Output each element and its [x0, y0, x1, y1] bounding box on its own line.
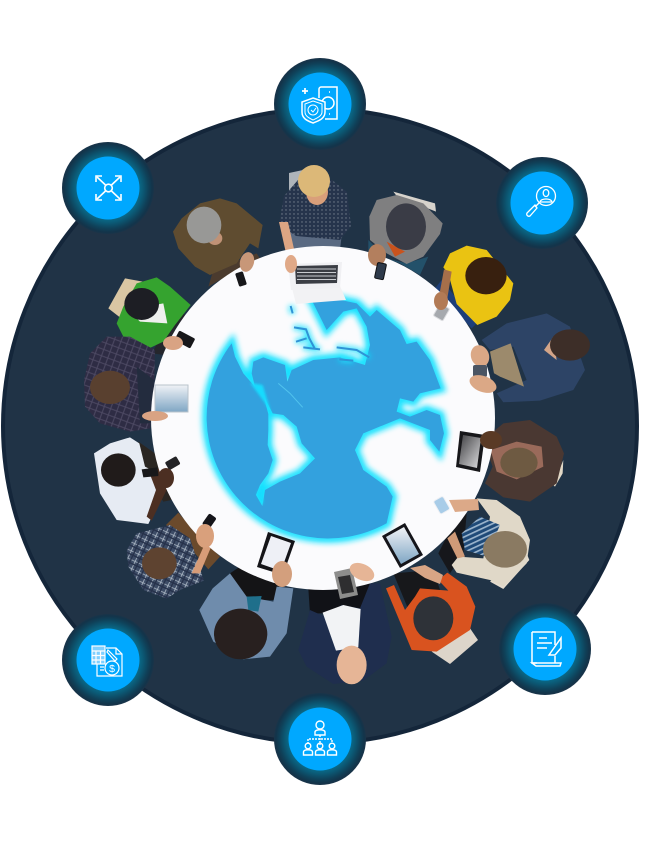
person: man in dark purple plaid shirt — [84, 337, 155, 432]
people seated around the table — [84, 165, 590, 684]
icon: org chart — [304, 721, 336, 755]
person: woman in yellow top — [435, 246, 513, 328]
person: person with afro in blue shirt — [199, 567, 293, 659]
Caribbean island streaks — [278, 383, 303, 407]
person: woman in grey top — [368, 192, 443, 275]
icon: magnifier over person — [527, 186, 556, 216]
tablet with suit man's hand — [334, 559, 377, 599]
tablet: purple plaid man — [142, 385, 188, 421]
person: bald man in dark suit — [298, 583, 392, 684]
tablet: orange man — [382, 523, 443, 584]
ocean — [207, 298, 444, 538]
dollar sign: $ — [109, 663, 115, 675]
icon: shield and banknote — [302, 87, 337, 123]
navy man's hands and phone — [467, 343, 499, 396]
badge: shield and banknote — [274, 58, 366, 150]
person: blonde woman in cream cardigan — [438, 498, 530, 589]
badge: search person — [496, 157, 588, 249]
hand on laptop — [285, 255, 297, 273]
person: man in white shirt — [94, 437, 172, 524]
grey woman's phone and hand — [368, 244, 387, 280]
person: woman in green cardigan — [108, 277, 191, 355]
person: man in navy sweater and khaki trousers — [482, 313, 590, 402]
white shirt man's phone and hand — [158, 456, 181, 488]
Central America strip — [250, 383, 271, 413]
badge: expand network — [62, 142, 154, 234]
laptop — [288, 262, 346, 304]
icon: document and quill — [532, 632, 561, 666]
tablet: right side — [456, 431, 502, 472]
person: man in grey plaid shirt — [127, 513, 220, 599]
tablet: afro person — [257, 532, 295, 587]
badge: document and quill — [499, 603, 591, 695]
badge: organisation chart — [274, 693, 366, 785]
navy background disc — [3, 109, 637, 743]
northern lakes and islands — [291, 306, 369, 361]
plaid man's phone and hand — [196, 513, 217, 548]
icon: expanding arrows — [96, 176, 121, 200]
badge: calculator and invoice — [62, 614, 154, 706]
cream woman's phone and hand — [433, 496, 479, 514]
table devices and hands — [142, 244, 502, 599]
person: man in orange sweater — [386, 570, 478, 664]
person: man in dark brown sweater — [483, 420, 564, 502]
green woman's phone and hand — [163, 330, 195, 350]
Patagonia tip — [257, 487, 263, 505]
northern lakes glow — [291, 306, 369, 361]
round white table — [151, 246, 495, 590]
ocean outline glow — [207, 298, 444, 538]
globe map on table — [207, 298, 444, 538]
brown man's phone and hand — [235, 251, 256, 287]
person: blond woman in dotted shirt — [279, 165, 351, 262]
yellow woman's phone and hand — [433, 292, 450, 321]
person: man in brown sweater — [173, 198, 263, 287]
